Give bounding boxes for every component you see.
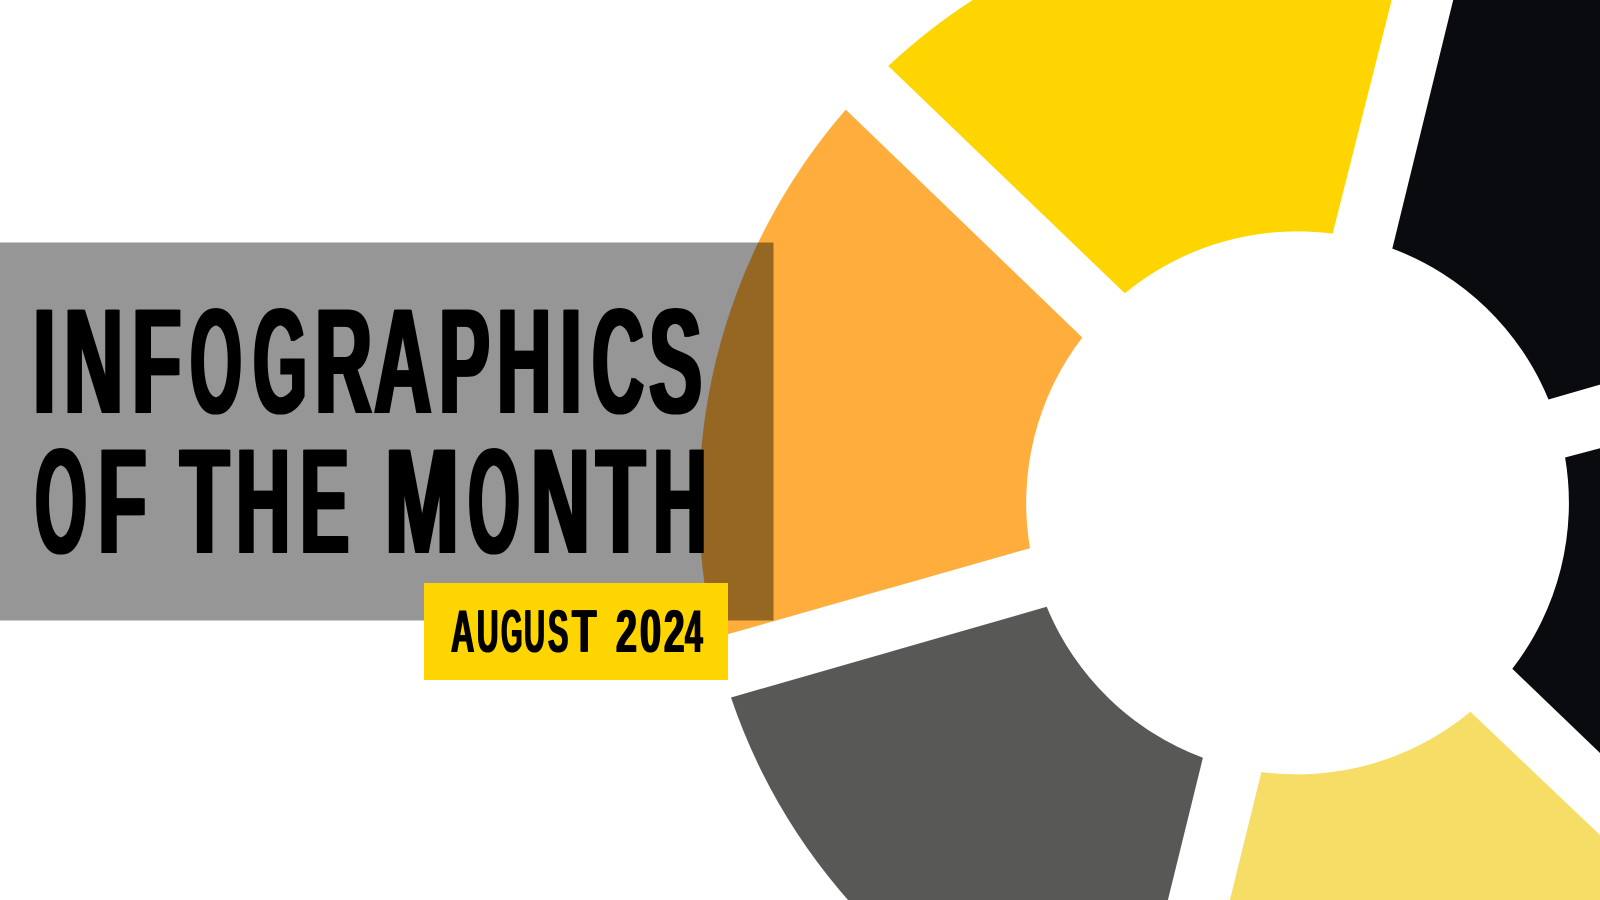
date badge: A — [450, 598, 474, 664]
date badge: 4 — [685, 598, 703, 664]
title line 1 — [33, 277, 702, 445]
date badge: U — [477, 598, 498, 664]
wheel segment: black upper — [1392, 0, 1600, 400]
title line 1: A — [374, 277, 432, 445]
title line 2: T — [596, 417, 646, 585]
title line 1: G — [253, 277, 307, 445]
wheel segment: black lower — [1512, 448, 1600, 753]
date badge: G — [501, 598, 522, 664]
title line 2 — [35, 417, 707, 585]
title line 2: T — [180, 417, 229, 585]
title line 1: H — [497, 277, 551, 445]
date badge: S — [548, 598, 569, 664]
title line 2: N — [531, 417, 589, 585]
date badge — [424, 582, 728, 680]
date badge: 2 — [664, 598, 685, 664]
title line 1: I — [560, 277, 582, 445]
title line 1: R — [315, 277, 372, 445]
title line 2: F — [98, 417, 146, 585]
wheel segment: yellow — [888, 0, 1392, 293]
title line 2: H — [236, 417, 290, 585]
title line 2: E — [300, 417, 350, 585]
title line 1: N — [64, 277, 123, 445]
date badge: 2 — [616, 598, 637, 664]
title line 2: M — [385, 417, 459, 585]
title line 1: O — [190, 277, 242, 445]
wheel segment: dark gray — [731, 607, 1203, 900]
wheel segment: orange — [699, 110, 1082, 638]
title line 1: I — [33, 277, 56, 445]
wheel segment: pale yellow — [1230, 712, 1600, 900]
title band — [0, 242, 774, 620]
segmented wheel — [699, 0, 1600, 900]
date badge: U — [524, 598, 545, 664]
date badge: 0 — [640, 598, 661, 664]
title line 2: O — [35, 417, 87, 585]
title line 2: O — [468, 417, 520, 585]
title line 2: H — [653, 417, 707, 585]
title line 1: C — [592, 277, 644, 445]
title line 1: P — [439, 277, 489, 445]
title line 1: F — [132, 277, 181, 445]
date badge: T — [572, 598, 597, 664]
title line 1: S — [649, 277, 702, 445]
